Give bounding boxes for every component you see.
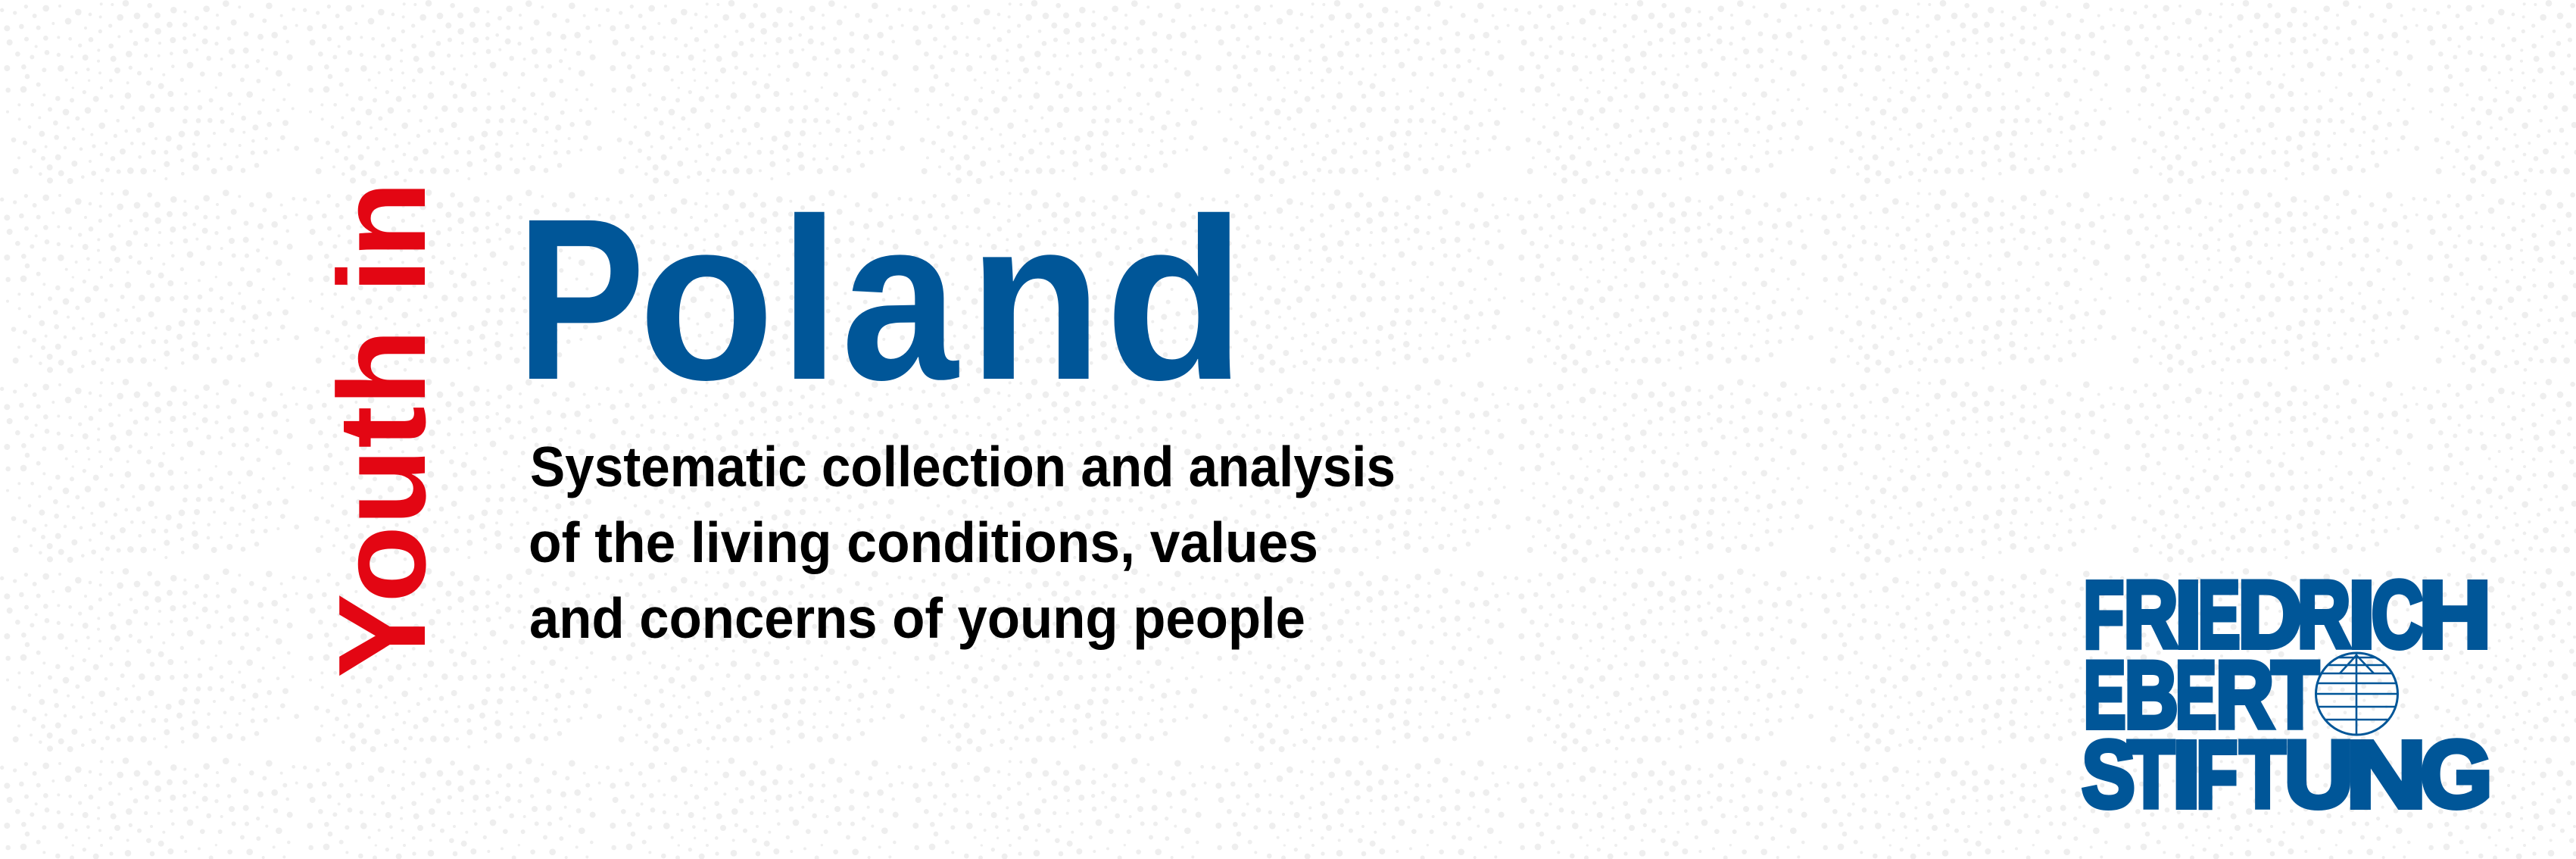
- logo wordmark: T: [2272, 642, 2319, 748]
- logo wordmark: I: [2175, 562, 2202, 668]
- title: Poland: n: [968, 171, 1102, 428]
- logo wordmark: T: [2128, 723, 2175, 827]
- title: Poland: a: [841, 171, 959, 428]
- title: Poland: d: [1105, 171, 1246, 428]
- rotated heading: Youth in: Youth in: [313, 181, 451, 678]
- logo wordmark: B: [2125, 642, 2178, 748]
- logo wordmark: I: [2172, 723, 2200, 827]
- logo wordmark: G: [2420, 723, 2493, 827]
- logo wordmark: F: [2196, 723, 2238, 827]
- logo wordmark: N: [2346, 723, 2427, 827]
- logo wordmark: R: [2123, 562, 2178, 668]
- logo wordmark: H: [2419, 562, 2491, 668]
- logo wordmark: E: [2175, 642, 2216, 748]
- logo wordmark: [2082, 562, 2493, 827]
- logo: Friedrich Ebert Stiftung: [2081, 578, 2490, 811]
- logo wordmark: E: [2198, 562, 2240, 668]
- logo wordmark: R: [2216, 642, 2274, 748]
- title: Poland: l: [779, 171, 840, 428]
- title: Poland: P: [516, 171, 645, 428]
- subtitle text block: of the living conditions, values: [529, 511, 1318, 574]
- title: Poland: o: [638, 171, 775, 428]
- logo wordmark: C: [2372, 562, 2423, 668]
- subtitle text block: Systematic collection and analysis: [530, 435, 1396, 498]
- logo wordmark: F: [2083, 562, 2124, 668]
- logo wordmark: T: [2240, 723, 2285, 827]
- icon: globe with lines: [2315, 651, 2399, 736]
- subtitle text block: and concerns of young people: [529, 586, 1305, 650]
- logo wordmark: D: [2238, 562, 2302, 668]
- logo wordmark: S: [2082, 723, 2135, 827]
- logo wordmark: I: [2348, 562, 2375, 668]
- logo wordmark: E: [2084, 642, 2126, 748]
- logo wordmark: U: [2284, 723, 2353, 827]
- logo wordmark: R: [2297, 562, 2350, 668]
- subtitle text block: [529, 435, 1396, 650]
